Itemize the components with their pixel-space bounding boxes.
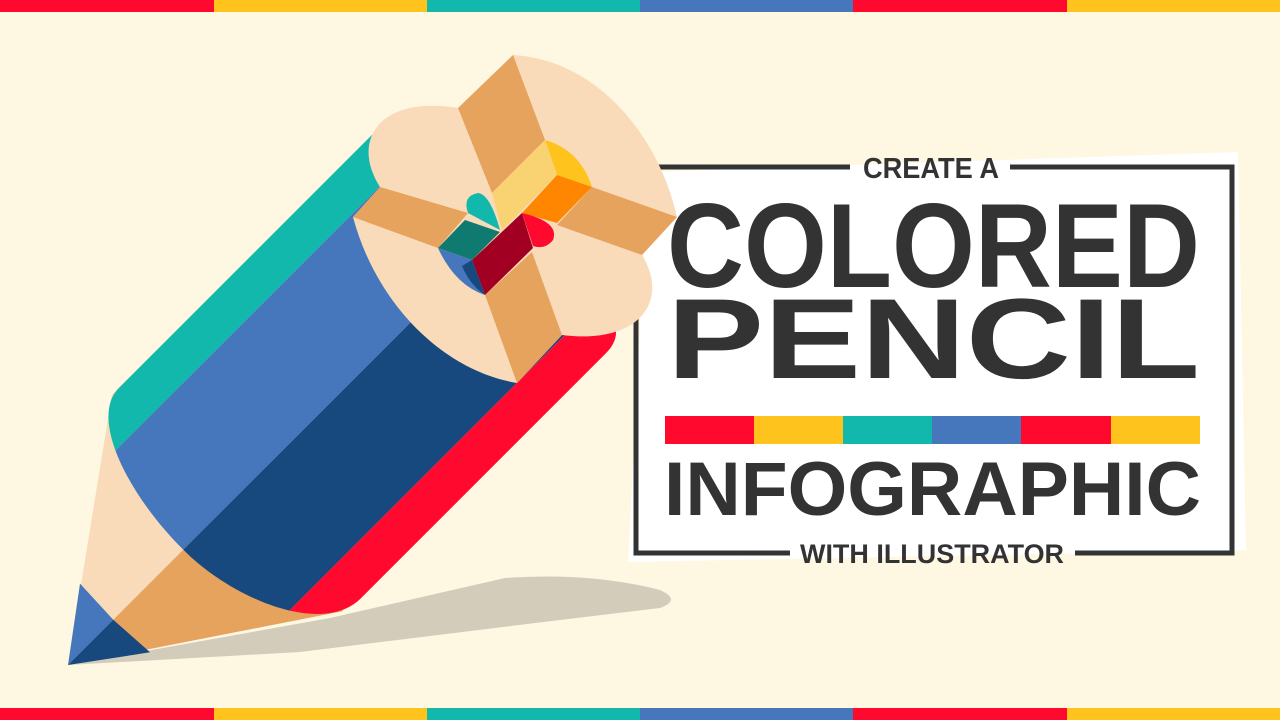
heading line 3: INFOGRAPHIC xyxy=(664,447,1201,532)
pencil shadow xyxy=(68,576,671,665)
subtitle bottom: WITH ILLUSTRATOR xyxy=(800,539,1064,569)
pencil xyxy=(68,55,677,665)
core colors xyxy=(545,140,592,187)
heading line 1: COLORED xyxy=(667,179,1200,313)
color bar xyxy=(665,416,1200,444)
wood cone xyxy=(0,354,266,665)
body strips xyxy=(108,134,616,614)
pencil end face xyxy=(353,55,677,383)
lead xyxy=(33,584,115,665)
bottom color stripe xyxy=(0,708,1280,720)
title panel xyxy=(628,152,1246,569)
wood cross arms xyxy=(353,187,468,248)
subtitle top: CREATE A xyxy=(863,153,999,185)
top color stripe xyxy=(0,0,1280,12)
heading line 2: PENCIL xyxy=(667,276,1200,403)
frame xyxy=(636,167,1232,553)
pencil body and tip xyxy=(68,134,616,665)
